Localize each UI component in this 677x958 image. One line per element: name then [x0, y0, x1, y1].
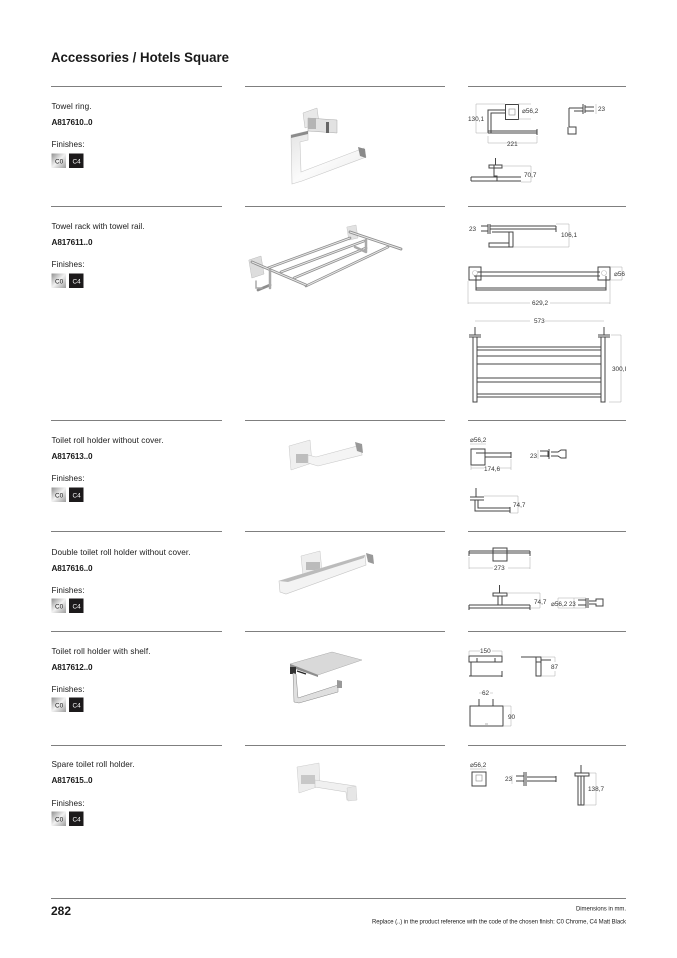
finishes label: Finishes: — [52, 260, 84, 269]
drawing: toilet roll holder dimensions — [470, 437, 566, 513]
top view: 74,7 — [534, 599, 547, 606]
panel: towel ring text — [52, 102, 93, 168]
photo: roll holder with shelf — [290, 652, 362, 703]
panel: towel rack text — [52, 222, 144, 288]
finish swatches: C4 — [72, 158, 81, 165]
front view: 150 — [480, 648, 491, 655]
finish swatches: C4 — [72, 702, 81, 709]
panel: double toilet roll holder text — [52, 548, 190, 613]
drawing: spare holder dimensions — [470, 762, 604, 805]
panel: roll holder with shelf text — [52, 647, 150, 712]
photo: toilet roll holder — [289, 440, 363, 470]
photo: towel rack — [249, 225, 401, 290]
front view: 629,2 — [532, 300, 548, 307]
reference: A817610..0 — [52, 118, 93, 127]
side view: 23 — [530, 453, 538, 460]
name: Toilet roll holder with shelf. — [52, 647, 150, 656]
side view: 23 — [569, 602, 576, 608]
drawing: towel ring dimensions — [468, 104, 606, 182]
front view: 273 — [494, 565, 505, 572]
title: Accessories / Hotels Square — [51, 49, 229, 65]
name: Toilet roll holder without cover. — [52, 436, 164, 445]
footnote: dimensions: Dimensions in mm. — [576, 906, 626, 912]
side view — [469, 224, 577, 247]
finish swatches: C0 — [55, 492, 64, 499]
front view — [468, 267, 625, 307]
finish swatches: C4 — [72, 278, 81, 285]
front view — [468, 104, 539, 148]
reference: A817616..0 — [52, 564, 93, 573]
side view: 23 — [505, 776, 513, 783]
rear view: 62 — [482, 690, 490, 697]
finish swatches: C4 — [72, 492, 81, 499]
finish swatches: C4 — [72, 603, 81, 610]
finishes label: Finishes: — [52, 685, 84, 694]
finishes label: Finishes: — [52, 586, 84, 595]
finish swatches — [52, 274, 84, 288]
finish swatches — [52, 488, 84, 502]
bottom view: 573 — [534, 318, 545, 325]
finishes label: Finishes: — [52, 474, 84, 483]
front view: ⌀56,2 — [470, 762, 487, 769]
top view: 70,7 — [524, 172, 537, 179]
drawing: towel rack dimensions — [468, 224, 626, 402]
side view: 106,1 — [561, 232, 577, 239]
side view: ⌀56,2 — [551, 601, 568, 608]
front view: 174,6 — [484, 466, 500, 473]
finish swatches: C0 — [55, 603, 64, 610]
finish swatches: C0 — [55, 278, 64, 285]
front view: ⌀56,2 — [522, 108, 539, 115]
side view — [551, 598, 603, 608]
front view — [470, 437, 511, 473]
footnote: finish codes: Replace (..) in the product reference with the code of the chosen finish: C0 Chrome, C4 Matt Black — [372, 920, 627, 926]
top view: 74,7 — [513, 502, 526, 509]
rear view: 90 — [508, 714, 516, 721]
rear view — [470, 690, 516, 726]
name: Spare toilet roll holder. — [52, 760, 134, 769]
finish swatches: C0 — [55, 702, 64, 709]
finish swatches: C4 — [72, 816, 81, 823]
row rules — [51, 86, 626, 898]
front view: ⌀56 — [614, 271, 625, 278]
reference: A817612..0 — [52, 663, 93, 672]
panel: spare roll holder text — [52, 760, 134, 826]
finish swatches: C0 — [55, 816, 64, 823]
finish swatches: C0 — [55, 158, 64, 165]
name: Double toilet roll holder without cover. — [52, 548, 190, 557]
page number: 282 — [51, 904, 71, 918]
reference: A817615..0 — [52, 776, 93, 785]
side view: 87 — [551, 664, 559, 671]
front view: 221 — [507, 141, 518, 148]
finishes label: Finishes: — [52, 140, 84, 149]
drawing: double toilet roll holder dimensions — [469, 548, 603, 610]
bottom view: 300,I — [612, 366, 626, 373]
finish swatches — [52, 154, 84, 168]
finish swatches — [52, 698, 84, 712]
name: Towel rack with towel rail. — [52, 222, 144, 231]
front view: ⌀56,2 — [470, 437, 487, 444]
photo: spare roll holder — [297, 763, 357, 801]
bottom view — [469, 318, 626, 402]
panel: toilet roll holder text — [52, 436, 164, 502]
photo: towel ring — [291, 108, 366, 184]
reference: A817611..0 — [52, 238, 93, 247]
reference: A817613..0 — [52, 452, 93, 461]
side view: 23 — [469, 226, 477, 233]
front view: 130,1 — [468, 116, 484, 123]
name: Towel ring. — [52, 102, 92, 111]
photo: double toilet roll holder — [279, 551, 374, 594]
finish swatches — [52, 598, 84, 613]
drawing: shelf holder dimensions — [469, 648, 559, 726]
side view: 23 — [598, 106, 606, 113]
finishes label: Finishes: — [52, 799, 84, 808]
finish swatches — [52, 812, 84, 826]
top view: 138,7 — [588, 786, 604, 793]
